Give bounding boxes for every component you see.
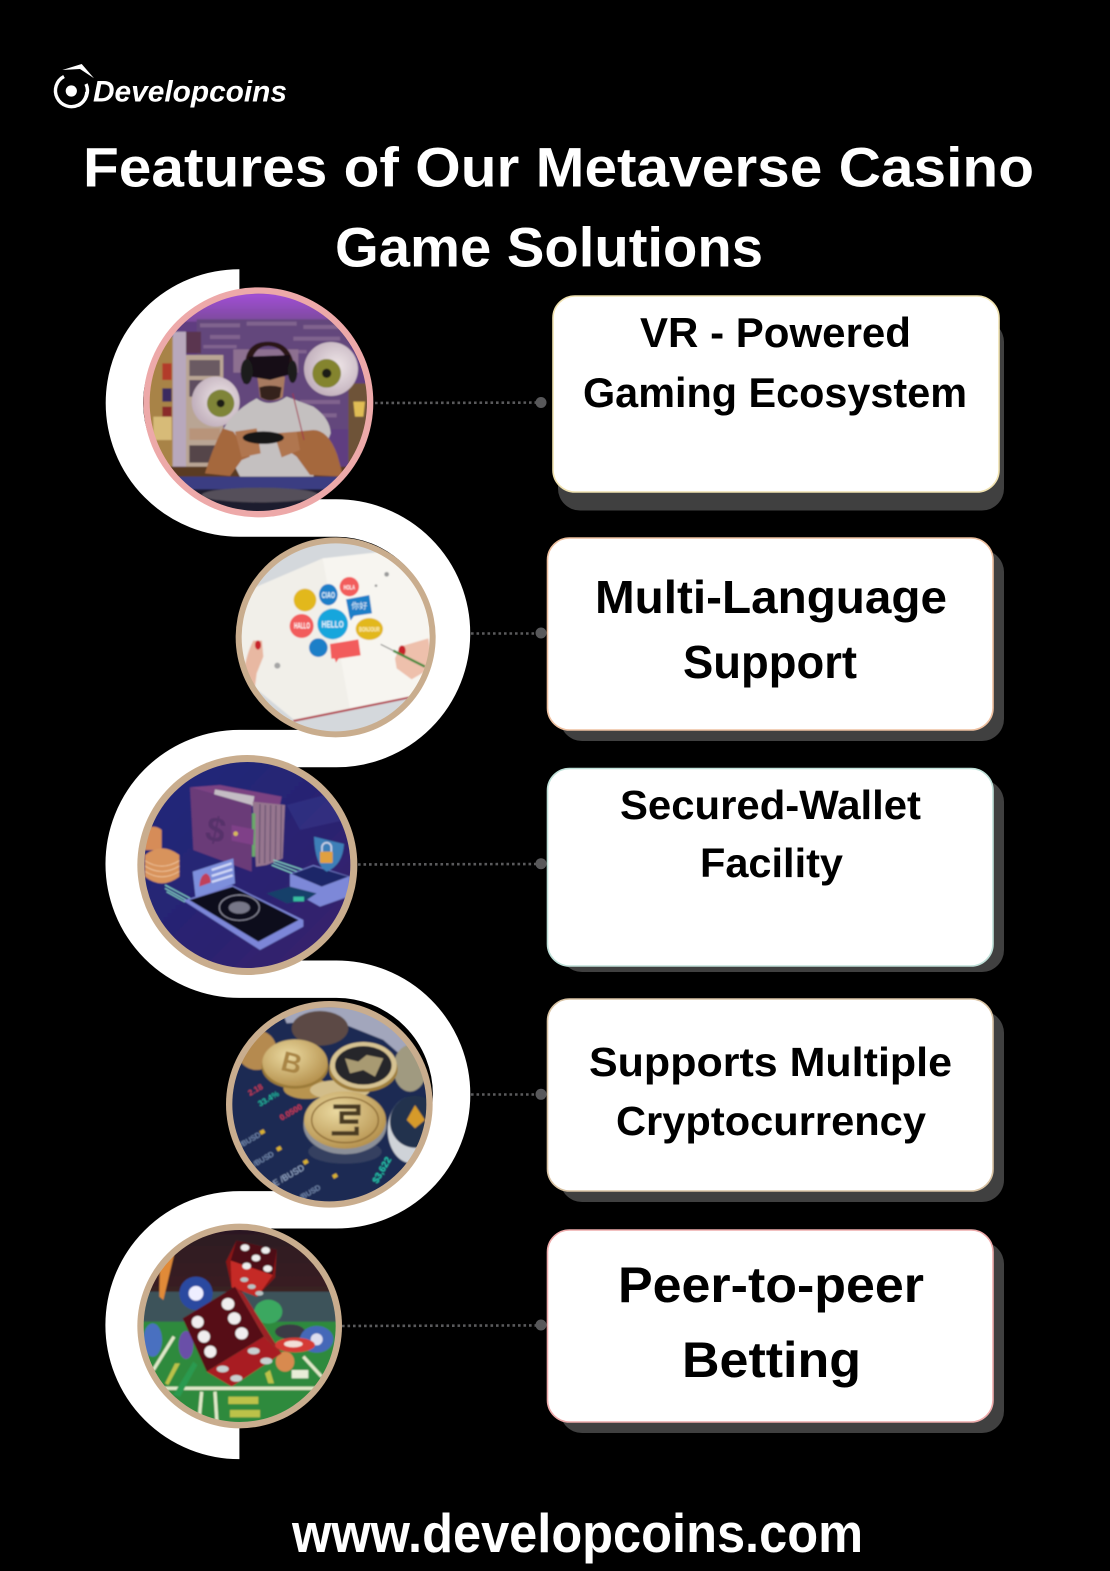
photo circle: multi-language notebook: HOLA (344, 584, 355, 591)
panel: supports multiple cryptocurrency (548, 999, 1004, 1202)
card body (548, 999, 993, 1191)
card shadow (560, 1011, 1004, 1202)
card heading (595, 571, 947, 688)
card heading (589, 1039, 952, 1144)
card heading: Cryptocurrency (616, 1098, 926, 1144)
photo circle: cryptocurrency coins (226, 1001, 440, 1210)
photo circle: cryptocurrency coins: E /BUSD (271, 1162, 306, 1188)
card heading: Secured-Wallet (620, 782, 921, 828)
photo circle: multi-language notebook (233, 537, 440, 743)
connector 5 (342, 1320, 546, 1330)
card heading: Betting (682, 1332, 861, 1388)
photo circle: cryptocurrency coins: 2.18 (246, 1082, 265, 1098)
panel: multi-language support (548, 538, 1004, 741)
card heading: VR - Powered (640, 309, 911, 356)
card heading: Supports Multiple (589, 1039, 952, 1085)
photo circle: multi-language notebook: BONJOUR (359, 627, 380, 634)
card heading: Facility (700, 840, 843, 886)
logo: Developcoins (55, 64, 287, 108)
card body (548, 538, 993, 730)
website url: www.developcoins.com (291, 1502, 863, 1564)
card heading: Support (683, 636, 857, 688)
photo circle: secured wallet: $ (202, 809, 229, 851)
logo wordmark: Developcoins (93, 76, 287, 108)
photo circle: multi-language notebook: HELLO (322, 620, 344, 630)
card heading (618, 1257, 924, 1388)
card shadow (558, 320, 1004, 510)
icon: logo mark (55, 64, 94, 107)
photo circle: multi-language notebook: CIAO (322, 591, 335, 600)
connector 3 (358, 858, 546, 869)
card heading: Gaming Ecosystem (583, 369, 967, 416)
connector 2 (471, 628, 546, 638)
connector 4 (471, 1089, 546, 1100)
card shadow (560, 780, 1004, 972)
photo circle: cryptocurrency coins: $3,622 (370, 1155, 393, 1185)
card shadow (560, 1242, 1004, 1433)
panel: VR-powered gaming ecosystem (553, 296, 1004, 510)
panel: peer-to-peer betting (548, 1230, 1004, 1433)
card heading: Peer-to-peer (618, 1257, 924, 1313)
photo circle: multi-language notebook: 你好 (351, 601, 367, 611)
photo circle: cryptocurrency coins: /BUSD (238, 1130, 262, 1149)
title: Features of Our Metaverse Casino (83, 136, 1034, 198)
card heading: Multi-Language (595, 571, 947, 623)
photo circle: VR gamer (140, 287, 380, 519)
card body (548, 768, 993, 966)
card body (548, 1230, 993, 1422)
photo circle: casino dice (137, 1223, 343, 1430)
photo circle: cryptocurrency coins: 0.0500 (278, 1102, 304, 1122)
card heading (620, 782, 921, 886)
white serpentine ribbon (124, 288, 452, 1440)
title: Game Solutions (335, 216, 763, 278)
photo circle: cryptocurrency coins: /BUSD (251, 1149, 275, 1168)
card heading (583, 309, 967, 416)
photo circle: secured wallet (137, 753, 360, 977)
panel: secured-wallet facility (548, 768, 1004, 972)
connector 1 (375, 397, 546, 408)
photo circle: cryptocurrency coins: /BUSD (298, 1183, 322, 1202)
photo circle: cryptocurrency coins: B (278, 1045, 305, 1080)
card body (553, 296, 999, 492)
photo circle: multi-language notebook: HALLO (294, 622, 310, 631)
card shadow (560, 550, 1004, 741)
photo circle: cryptocurrency coins: 33.4% (256, 1089, 281, 1108)
title (83, 136, 1034, 278)
